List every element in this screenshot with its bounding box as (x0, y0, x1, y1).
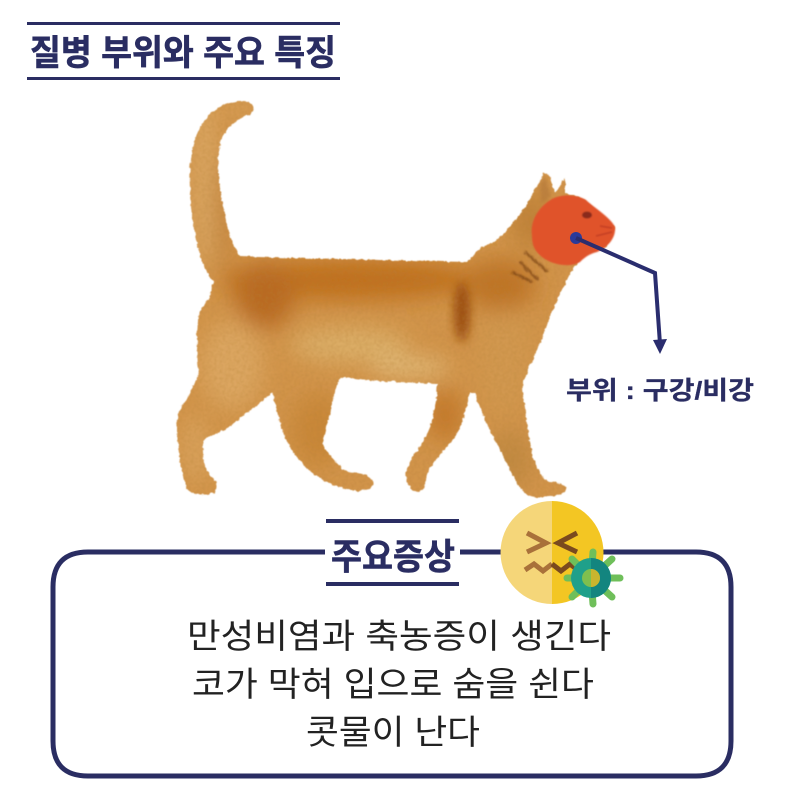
arrow: pointer from muzzle to label (570, 232, 667, 354)
title (27, 22, 340, 80)
illustration: walking orange cat (170, 90, 620, 505)
label: affected area: 부위 : 구강/비강 (566, 377, 754, 405)
neck stripes (512, 252, 548, 282)
icon: virus (567, 552, 620, 604)
panel: main symptoms (53, 519, 731, 776)
symptoms text (187, 618, 611, 752)
ears (540, 176, 551, 205)
heading: main symptoms (326, 519, 459, 586)
highlighted area: muzzle and nasal region (532, 195, 615, 265)
heading: main symptoms: 주요증상 (331, 536, 455, 577)
icon: sick face with virus (500, 501, 620, 604)
symptoms text: 만성비염과 축농증이 생긴다 (187, 618, 611, 656)
title: 질병 부위와 주요 특징 (30, 34, 336, 73)
symptoms text: 코가 막혀 입으로 숨을 쉰다 (192, 666, 594, 704)
symptoms text: 콧물이 난다 (306, 714, 480, 752)
